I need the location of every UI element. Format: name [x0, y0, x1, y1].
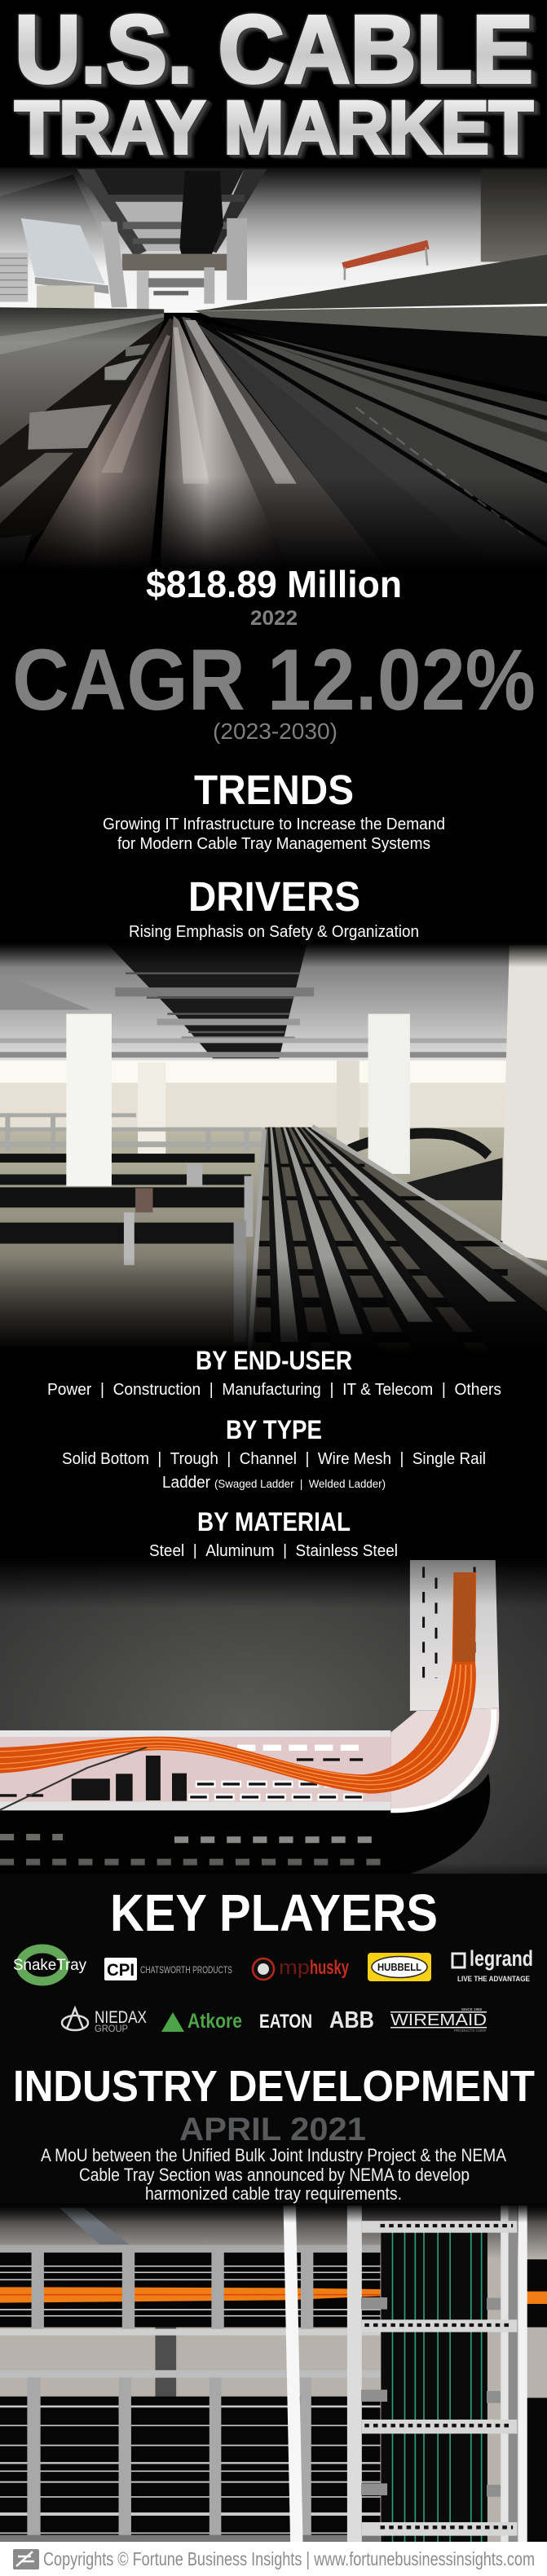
- logo: Atkore: [161, 2010, 242, 2033]
- logo: Hubbell: HUBBELL: [377, 1961, 421, 1973]
- title: TRAY MARKET: [15, 86, 533, 169]
- segmentation: by type: (Swaged Ladder | Welded Ladder): [214, 1477, 386, 1490]
- forecast period: (2023-2030): [213, 719, 337, 744]
- drivers heading: DRIVERS: [188, 873, 360, 920]
- key players heading: KEY PLAYERS: [110, 1884, 438, 1942]
- segmentation: by type: Ladder: [162, 1474, 210, 1492]
- logo: Eaton: EATON: [259, 2011, 312, 2033]
- logo: Niedax Group: NIEDAX: [95, 2008, 147, 2027]
- logo: Wiremaid: [390, 2007, 487, 2033]
- steel rails: [0, 2245, 381, 2542]
- panel: key players background: [0, 1874, 547, 2204]
- segmentation: by type: BY TYPE: [226, 1415, 322, 1444]
- segmentation: by end-user: [47, 1346, 501, 1399]
- segmentation: by type: Solid Bottom | Trough | Channel | Wire Mesh | Single Rail: [62, 1450, 486, 1468]
- photo: cable tray floor view: [0, 167, 547, 570]
- development date: APRIL 2021: [179, 2112, 366, 2147]
- footer bar: [0, 2542, 547, 2576]
- logo: Chatsworth Products: [104, 1958, 232, 1980]
- logo: Legrand: [452, 1946, 533, 1983]
- logo: Chatsworth Products: CPI: [107, 1961, 135, 1980]
- photo: rack with orange and green cables: [0, 2204, 547, 2542]
- development text: Cable Tray Section was announced by NEMA to develop: [79, 2165, 470, 2185]
- base year: 2022: [250, 607, 298, 630]
- cable tray with cables: [248, 1127, 547, 1358]
- development text: [41, 2145, 506, 2204]
- segmentation: by material: BY MATERIAL: [197, 1507, 351, 1536]
- logo: Hubbell: [368, 1953, 431, 1981]
- logo: mpHusky: mp: [279, 1957, 310, 1979]
- logo: Niedax Group: GROUP: [95, 2023, 128, 2034]
- logo: Legrand: legrand: [470, 1946, 533, 1971]
- trends heading: TRENDS: [194, 767, 354, 813]
- logo: Legrand: LIVE THE ADVANTAGE: [457, 1975, 530, 1983]
- drivers text: Rising Emphasis on Safety & Organization: [129, 923, 419, 941]
- segmentation: by material: [149, 1507, 398, 1560]
- icon: red bracket on wall: [342, 240, 429, 280]
- logo: mpHusky: [253, 1957, 349, 1980]
- photo: orange cables in white tray: [0, 1558, 547, 1890]
- trends text: Growing IT Infrastructure to Increase the Demand: [103, 815, 445, 833]
- segmentation: by end-user: BY END-USER: [196, 1346, 352, 1375]
- orange cable band: [0, 2287, 547, 2304]
- logo: Wiremaid: WIREMAID: [390, 2011, 487, 2029]
- green cable panel: [361, 2232, 502, 2542]
- electronic devices: [0, 1747, 187, 1810]
- logo: Atkore: Atkore: [187, 2010, 242, 2033]
- market value: $818.89 Million: [146, 563, 402, 605]
- trends text: for Modern Cable Tray Management Systems: [117, 835, 430, 853]
- segmentation: by type: [62, 1415, 486, 1492]
- logo: SnakeTray: SnakeTray: [13, 1957, 86, 1974]
- logo: SnakeTray: [13, 1949, 86, 1981]
- trends text: [103, 815, 445, 853]
- photo: cable tray hall: [0, 943, 547, 1369]
- logo: mpHusky: husky: [310, 1957, 349, 1979]
- logo: Chatsworth Products: CHATSWORTH PRODUCTS: [140, 1964, 232, 1976]
- logo: ABB: ABB: [329, 2007, 374, 2033]
- logo: Wiremaid: PRODUCTS CORP: [454, 2029, 487, 2033]
- logo: Niedax Group: [62, 2008, 147, 2034]
- icon: Fortune Business Insights logo: [13, 2549, 39, 2569]
- segmentation: by end-user: Power | Construction | Manufacturing | IT & Telecom | Others: [47, 1381, 501, 1399]
- development text: harmonized cable tray requirements.: [145, 2183, 402, 2204]
- black cable bands: [0, 2251, 547, 2542]
- cable bundle: [21, 315, 547, 570]
- orange cable bundle: [0, 1572, 476, 1794]
- title: [15, 0, 533, 169]
- logo: Wiremaid: SINCE 1958: [461, 2007, 483, 2011]
- segmentation: by material: Steel | Aluminum | Stainless Steel: [149, 1542, 398, 1560]
